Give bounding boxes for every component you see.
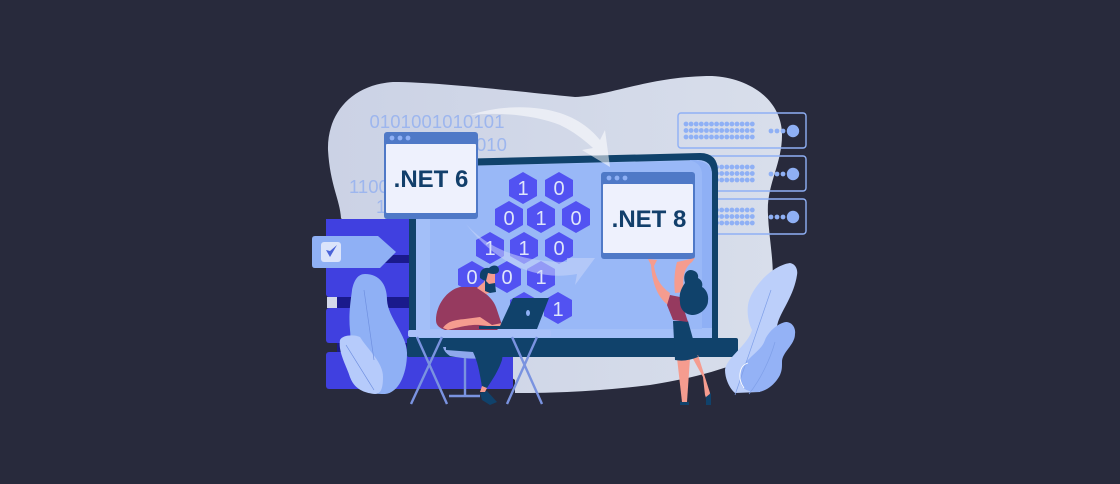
laptop screen bbox=[416, 160, 712, 338]
hexagon digits: 0 bbox=[466, 267, 478, 289]
window: .NET 6: .NET 6 bbox=[394, 166, 468, 193]
legs bbox=[677, 358, 690, 402]
window: .NET 8: .NET 8 bbox=[612, 206, 686, 233]
binary text: 1 bbox=[376, 196, 386, 217]
screen right band bbox=[690, 160, 712, 328]
man at desk bbox=[436, 266, 505, 405]
arrow: migration inside screen bbox=[466, 224, 595, 285]
hexagon digits: 0 bbox=[553, 238, 565, 260]
hexagon grid bbox=[458, 172, 590, 324]
hexagon digits: 1 bbox=[535, 267, 547, 289]
tag with checkbox bbox=[312, 236, 396, 268]
desk bbox=[408, 330, 551, 404]
server dots bbox=[686, 124, 799, 223]
screen inner panel bbox=[430, 161, 702, 329]
binary text bbox=[349, 111, 507, 217]
hexagon digits: 1 bbox=[517, 178, 529, 200]
hair bbox=[680, 270, 708, 315]
binary text: 1100 bbox=[349, 176, 389, 197]
hexagon digits: 0 bbox=[501, 267, 513, 289]
laptop small bbox=[479, 298, 549, 329]
binary text: 0101001010101 bbox=[370, 111, 504, 132]
hair bbox=[480, 266, 499, 281]
hexagon digits bbox=[466, 178, 582, 321]
arrow: top curved bbox=[470, 107, 610, 167]
window: .NET 8 bbox=[601, 172, 695, 259]
hexagon digits: 1 bbox=[518, 238, 530, 260]
binary text: 010 bbox=[476, 134, 507, 155]
hexagon digits: 1 bbox=[535, 208, 547, 230]
arm bbox=[443, 317, 503, 330]
torso bbox=[436, 287, 502, 330]
hexagon digits: 0 bbox=[503, 208, 515, 230]
legs bbox=[446, 338, 505, 388]
hexagon digits: 1 bbox=[484, 238, 496, 260]
server stack bbox=[326, 219, 513, 389]
top bbox=[667, 295, 688, 322]
hexagon digits: 0 bbox=[570, 208, 582, 230]
stool bbox=[443, 347, 486, 359]
beard bbox=[485, 280, 496, 293]
hexagon digits: 1 bbox=[552, 299, 564, 321]
plant right bbox=[725, 263, 797, 395]
face bbox=[477, 273, 495, 294]
woman bbox=[648, 258, 711, 405]
laptop base bbox=[407, 338, 738, 357]
window: .NET 6 bbox=[384, 132, 478, 219]
arms bbox=[648, 259, 670, 305]
background blob bbox=[328, 76, 782, 393]
skirt bbox=[673, 321, 698, 361]
server racks bbox=[678, 113, 806, 234]
hexagon digits: 0 bbox=[553, 178, 565, 200]
laptop frame bbox=[409, 153, 718, 345]
plant left bbox=[340, 274, 407, 394]
